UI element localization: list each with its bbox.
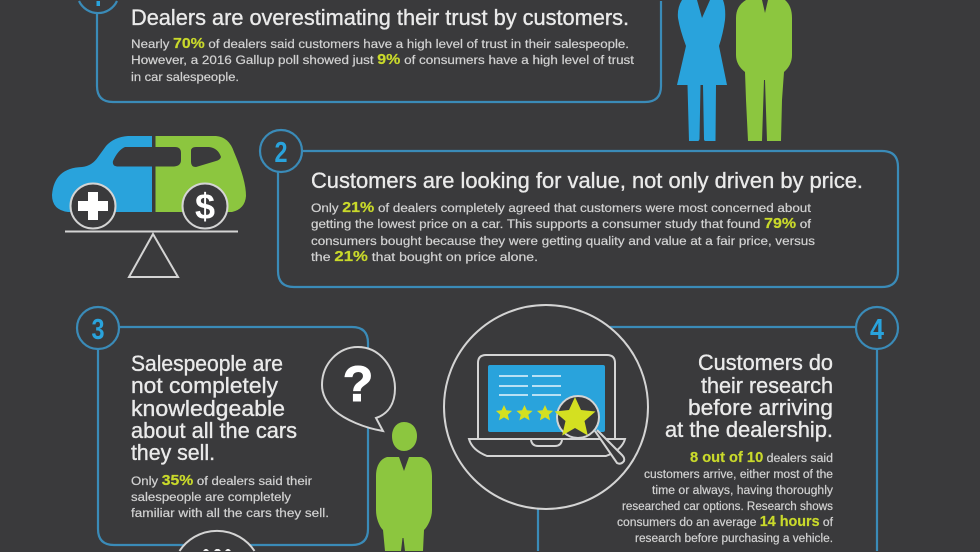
car left half bbox=[52, 136, 152, 212]
heading 3: knowledgeable bbox=[131, 396, 285, 421]
heading 4: before arriving bbox=[688, 395, 833, 420]
person bbox=[376, 422, 432, 551]
body text 1: However, a 2016 Gallup poll showed just 9% of consumers have a high level of trust bbox=[131, 52, 635, 68]
body text 4: 8 out of 10 dealers said bbox=[690, 450, 833, 466]
body text 1: in car salespeople. bbox=[131, 70, 239, 84]
icon: laptop in circle bbox=[444, 305, 648, 509]
heading 4: Customers do bbox=[698, 350, 833, 375]
speech bubble: ? bbox=[343, 356, 373, 412]
icon: salesperson with question bubble bbox=[322, 347, 432, 551]
panel 1: trust bbox=[79, 1, 661, 102]
body text 3: familiar with all the cars they sell. bbox=[131, 506, 329, 520]
body text 2: consumers bought because they were getting quality and value at a fair price, versus bbox=[311, 234, 815, 248]
body text 4: customers arrive, either most of the bbox=[644, 467, 833, 481]
speech bubble bbox=[322, 347, 395, 431]
body text 4: research before purchasing a vehicle. bbox=[635, 531, 833, 545]
number badge 3 bbox=[77, 307, 119, 349]
body text 4: consumers do an average 14 hours of bbox=[617, 514, 834, 530]
car windows bbox=[113, 147, 221, 167]
number badge 4: 4 bbox=[870, 314, 884, 346]
heading 1: Dealers are overestimating their trust by customers. bbox=[131, 5, 629, 30]
magnifier bbox=[554, 396, 624, 464]
icon: couple bbox=[677, 0, 792, 141]
heading 2: Customers are looking for value, not only driven by price. bbox=[311, 168, 863, 193]
panel 2: value bbox=[260, 130, 898, 287]
heading 3: Salespeople are bbox=[131, 351, 283, 376]
man bbox=[736, 0, 792, 141]
icon: car on balance bbox=[52, 136, 246, 277]
body text 2: Only 21% of dealers completely agreed that customers were most concerned about bbox=[311, 200, 812, 216]
body text 4: researched car options. Research shows bbox=[622, 499, 833, 513]
body text 4 bbox=[617, 450, 834, 545]
wheel: dollar: $ bbox=[195, 186, 215, 227]
woman bbox=[677, 0, 727, 141]
body text 3: salespeople are completely bbox=[131, 490, 292, 504]
panel 4: research bbox=[444, 305, 898, 551]
heading 3 bbox=[131, 351, 297, 465]
balance beam and fulcrum bbox=[65, 232, 238, 277]
body text 3 bbox=[131, 473, 329, 520]
screen bbox=[488, 365, 605, 432]
icon: circle at bottom edge bbox=[180, 531, 254, 551]
number badge 1 bbox=[79, 1, 117, 13]
number badge 2: 2 bbox=[274, 137, 288, 169]
body text 2: getting the lowest price on a car. This supports a consumer study that found 79% of bbox=[311, 216, 812, 232]
heading 3: they sell. bbox=[131, 440, 215, 465]
body text 1 bbox=[131, 36, 635, 84]
car right half bbox=[156, 136, 246, 212]
heading 3: not completely bbox=[131, 373, 278, 398]
panel 3: knowledge bbox=[77, 307, 368, 545]
wheel: plus bbox=[70, 184, 116, 228]
body text 2 bbox=[311, 200, 815, 265]
body text 1: Nearly 70% of dealers said customers have a high level of trust in their salespeople. bbox=[131, 36, 629, 52]
body text 3: Only 35% of dealers said their bbox=[131, 473, 312, 489]
heading 4: at the dealership. bbox=[665, 417, 833, 442]
body text 2: the 21% that bought on price alone. bbox=[311, 249, 538, 265]
heading 4 bbox=[665, 350, 833, 442]
rating stars bbox=[496, 405, 553, 420]
heading 3: about all the cars bbox=[131, 418, 297, 443]
number badge 4 bbox=[856, 307, 898, 349]
body text 4: time or always, having thoroughly bbox=[652, 483, 834, 497]
wheel: dollar bbox=[182, 184, 228, 228]
heading 4: their research bbox=[701, 373, 833, 398]
number badge 3: 3 bbox=[92, 314, 104, 346]
laptop bbox=[478, 355, 615, 439]
number badge 2 bbox=[260, 130, 302, 172]
